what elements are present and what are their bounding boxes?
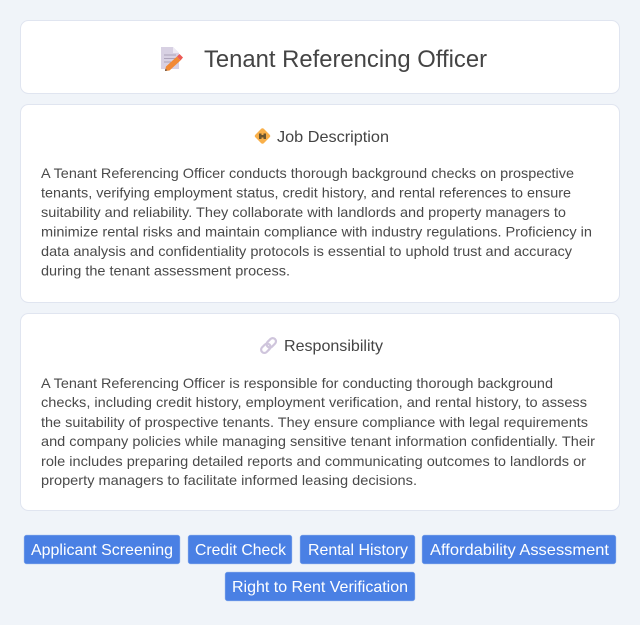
panel: responsibility [20,314,620,510]
tag: credit check: Credit Check [195,542,287,559]
text: job description body [41,165,592,278]
heading: responsibility: Responsibility [284,338,383,355]
tag: credit check [188,535,292,564]
tag: rental history: Rental History [308,542,408,559]
text: responsibility body: property managers to facilitate informed leasing decisions. [41,472,417,488]
text: job description body: suitability and reliability. They collaborate with landlords and property managers to [41,204,566,220]
tag: applicant screening: Applicant Screening [31,542,173,559]
tag: affordability assessment: Affordability Assessment [430,542,610,559]
text: job description body: data analysis and confidentiality protocols is essential to uphold trust and accuracy [41,243,572,259]
tag: affordability assessment [422,535,616,564]
tag: applicant screening [24,535,180,564]
text: responsibility body: the suitability of prospective tenants. They ensure compliance with legal requirements [41,414,588,430]
icon: chain link [260,337,277,354]
text: responsibility body [41,375,595,488]
icon: document with pencil [161,47,183,71]
tag: right to rent verification [225,572,415,601]
text: responsibility body: and company policies while managing sensitive tenant information confidentially. Their [41,433,595,449]
icon: puzzle diamond [254,128,271,144]
text: responsibility body: checks, including credit history, employment verification, and rental history, to assess [41,394,587,410]
text: job description body: tenants, verifying employment status, credit history, and rental references to ensure [41,184,571,200]
text: job description body: minimize rental risks and maintain compliance with industry regulations. Proficiency in [41,224,592,240]
panel: job description [20,104,620,302]
panel: title card [20,20,620,94]
text: job description body: during the tenant assessment process. [41,262,290,278]
title: Tenant Referencing Officer [204,46,487,73]
text: responsibility body: role includes preparing detailed reports and communicating outcomes to landlords or [41,453,586,469]
text: responsibility body: A Tenant Referencing Officer is responsible for conducting thorough background [41,375,553,391]
heading: job description: Job Description [277,129,389,146]
tag: rental history [300,535,415,564]
tag: right to rent verification: Right to Rent Verification [232,579,408,596]
text: job description body: A Tenant Referencing Officer conducts thorough background checks on prospective [41,165,574,181]
